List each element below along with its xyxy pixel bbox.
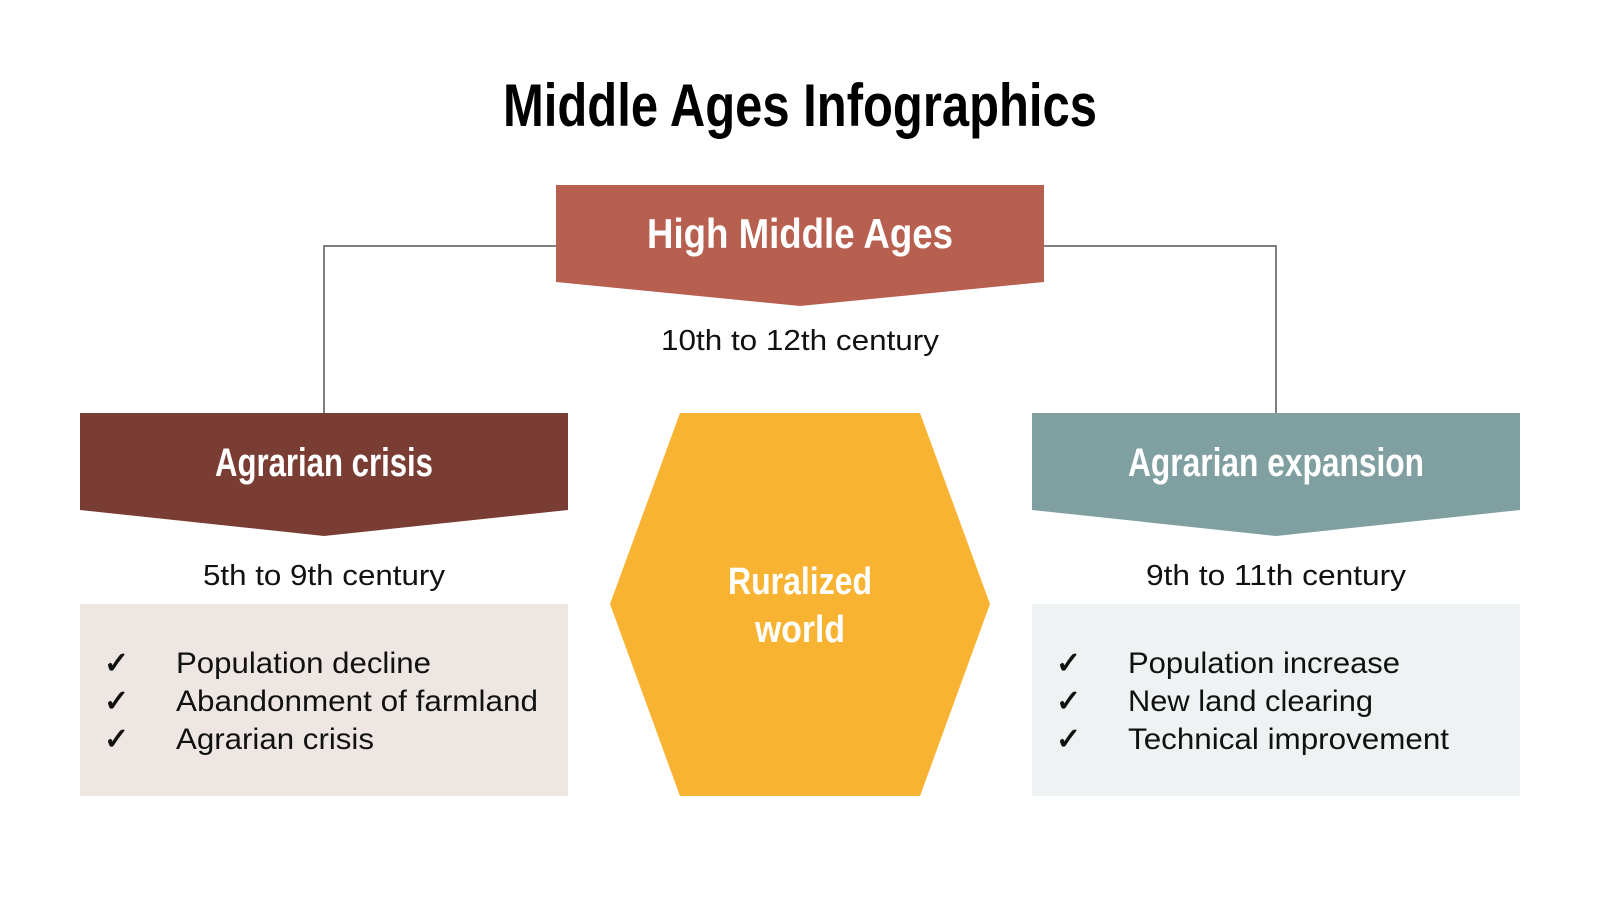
- panel: expansion list: ✓: [1056, 723, 1081, 756]
- hexagon: Ruralized world: world: [754, 609, 845, 651]
- hexagon: Ruralized world: Ruralized: [728, 561, 872, 603]
- panel: crisis list: ✓: [104, 685, 129, 718]
- banner: Agrarian expansion: [1032, 413, 1520, 536]
- subtitle: 9th to 11th century: 9th to 11th century: [1146, 560, 1407, 592]
- connector lines: [324, 246, 1276, 413]
- panel: crisis list: [80, 604, 568, 796]
- panel: expansion list: Population increase: [1128, 647, 1400, 680]
- panel: expansion list: [1032, 604, 1520, 796]
- panel: crisis list: Population decline: [176, 647, 431, 680]
- panel: crisis list: ✓: [104, 647, 129, 680]
- subtitle: 10th to 12th century: 10th to 12th century: [661, 325, 940, 357]
- panel: crisis list: ✓: [104, 723, 129, 756]
- banner: High Middle Ages: [556, 185, 1044, 306]
- hexagon: Ruralized world: [610, 413, 990, 796]
- banner: Agrarian crisis: Agrarian crisis: [215, 441, 433, 485]
- panel: expansion list: ✓: [1056, 685, 1081, 718]
- banner: Agrarian expansion: Agrarian expansion: [1128, 441, 1424, 485]
- panel: crisis list: Agrarian crisis: [176, 723, 374, 756]
- title: Middle Ages Infographics: [503, 72, 1097, 139]
- banner: Agrarian crisis: [80, 413, 568, 536]
- panel: crisis list: Abandonment of farmland: [176, 685, 538, 718]
- panel: expansion list: Technical improvement: [1128, 723, 1450, 756]
- subtitle: 5th to 9th century: 5th to 9th century: [203, 560, 446, 592]
- panel: expansion list: ✓: [1056, 647, 1081, 680]
- banner: High Middle Ages: High Middle Ages: [647, 210, 953, 257]
- panel: expansion list: New land clearing: [1128, 685, 1373, 718]
